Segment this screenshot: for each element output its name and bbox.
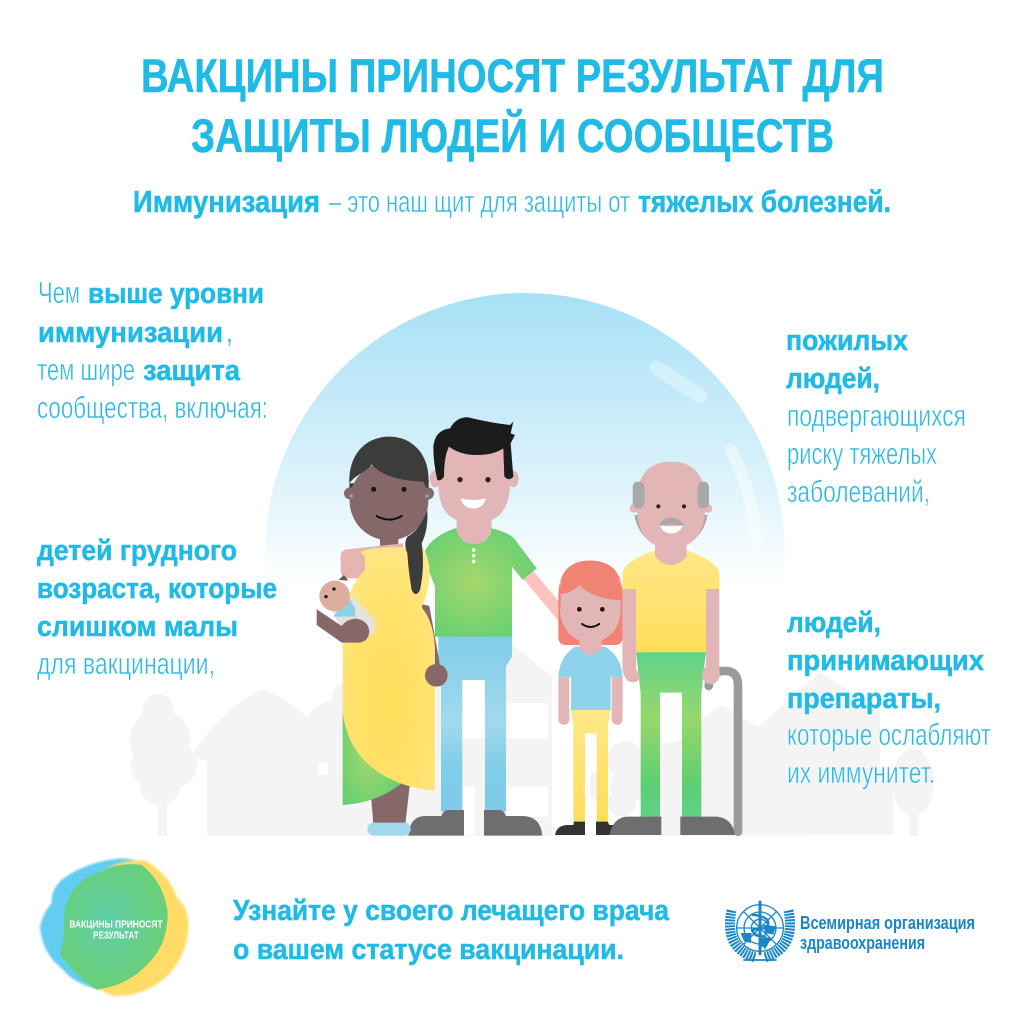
man: eyes	[457, 477, 491, 482]
subtitle: тяжелых болезней.	[638, 184, 891, 219]
baby: body	[333, 597, 355, 617]
background: windows	[318, 680, 548, 835]
woman: shoulder	[341, 543, 403, 578]
protective dome	[265, 293, 785, 600]
logo: yellow blob	[92, 860, 189, 996]
girl: fringe	[558, 561, 623, 607]
WHO name: Всемирная организация	[800, 913, 975, 933]
grandfather	[609, 462, 738, 835]
man: shirt	[423, 528, 537, 637]
logo: green blob	[60, 864, 168, 989]
baby: hair	[338, 575, 348, 581]
woman: face	[350, 462, 428, 540]
WHO emblem	[730, 902, 790, 960]
man: arm	[528, 575, 563, 617]
text block: intro: выше уровни	[88, 278, 264, 310]
WHO name	[800, 913, 975, 953]
WHO: ribbon	[743, 957, 777, 962]
campaign logo	[40, 858, 189, 996]
grandfather: shirt	[622, 550, 719, 652]
text block: intro	[37, 275, 268, 425]
WHO: continents	[741, 925, 776, 950]
text block: immunocompromised	[787, 607, 991, 790]
woman: hair top	[349, 437, 429, 483]
man: hair	[433, 417, 515, 480]
text block: elderly: подвергающихся	[787, 398, 966, 433]
grandfather: beard edge	[634, 515, 708, 544]
girl: smile	[582, 624, 599, 627]
woman: holding arm	[317, 609, 369, 643]
logo: text: РЕЗУЛЬТАТ	[93, 931, 139, 942]
woman: neck	[380, 532, 398, 552]
background: central building	[340, 637, 552, 836]
text block: intro: ,	[225, 314, 234, 349]
call to action: Узнайте у своего лечащего врача	[233, 895, 670, 927]
woman: hand	[425, 664, 448, 687]
girl	[555, 561, 627, 835]
grandfather: shoes	[609, 817, 735, 835]
text block: immunocompromised: препараты,	[787, 683, 941, 715]
text block: elderly: риску тяжелых	[787, 436, 937, 471]
subtitle	[133, 184, 891, 219]
man: trousers	[438, 635, 512, 812]
text block: immunocompromised: людей,	[787, 607, 881, 639]
woman: eyes	[371, 487, 406, 492]
background: middle tree	[590, 741, 646, 817]
baby: head	[319, 581, 350, 611]
text block: elderly: людей,	[786, 363, 880, 395]
baby: wrap	[330, 597, 375, 635]
grandfather: eyes	[656, 504, 686, 508]
background: right tree	[892, 749, 934, 836]
grandfather: ears	[630, 504, 712, 513]
background: neighbourhood silhouette	[130, 637, 934, 836]
WHO: snake	[752, 915, 768, 946]
text block: infants: слишком малы	[37, 611, 238, 643]
girl: trousers	[571, 710, 611, 823]
man: shoes	[408, 810, 542, 836]
text block: infants: для вакцинации,	[37, 646, 215, 681]
grandfather: head	[637, 462, 706, 565]
grandfather: moustache	[659, 518, 683, 526]
background: left house	[192, 682, 345, 836]
woman: arm	[422, 604, 441, 668]
woman: hair back	[349, 480, 429, 517]
woman: earrings	[350, 494, 429, 498]
woman: green underskirt	[343, 707, 402, 805]
girl: shoes	[555, 822, 627, 835]
man: head	[438, 443, 510, 544]
woman: legs	[370, 783, 410, 824]
WHO: staff	[755, 902, 764, 954]
background: left tree	[130, 694, 197, 836]
girl: eyes	[577, 607, 605, 612]
text block: infants	[37, 535, 277, 681]
text block: elderly: пожилых	[786, 325, 908, 357]
logo: text	[69, 920, 163, 942]
girl: face	[560, 580, 621, 655]
man: buttons	[472, 548, 475, 563]
logo: text: ВАКЦИНЫ ПРИНОСЯТ	[69, 920, 163, 931]
text block: infants: возраста, которые	[37, 573, 277, 605]
call to action: о вашем статусе вакцинации.	[233, 934, 624, 966]
call to action	[233, 895, 670, 966]
title	[141, 49, 884, 162]
grandfather: arms	[622, 587, 720, 684]
grandfather: cane	[709, 671, 738, 832]
baby: eyes	[324, 587, 336, 598]
man: smile	[461, 498, 486, 508]
text block: intro: тем шире	[37, 352, 135, 387]
man	[408, 417, 563, 836]
text block: intro: защита	[143, 355, 241, 387]
girl: arms	[558, 677, 623, 725]
text block: intro: иммунизации	[38, 317, 223, 349]
woman: dress	[343, 547, 435, 791]
subtitle: Иммунизация	[133, 184, 320, 219]
woman: braid	[405, 510, 427, 594]
WHO: globe	[737, 905, 783, 951]
text block: elderly: заболеваний,	[787, 474, 930, 509]
grandfather: mouth	[660, 525, 683, 533]
background: right houses	[660, 672, 893, 836]
text block: immunocompromised: принимающих	[787, 645, 984, 677]
text block: intro: Чем	[38, 275, 80, 310]
text block: elderly	[786, 325, 966, 509]
text block: infants: детей грудного	[37, 535, 237, 567]
title: ЗАЩИТЫ ЛЮДЕЙ И СООБЩЕСТВ	[191, 109, 834, 162]
woman: smile	[377, 516, 402, 520]
WHO: wreath	[730, 910, 790, 957]
woman: ears	[344, 487, 434, 499]
text block: immunocompromised: их иммунитет.	[787, 755, 935, 790]
subtitle: – это наш щит для защиты от	[329, 184, 630, 219]
woman: foot	[367, 823, 411, 836]
girl: hair back	[558, 561, 623, 645]
man: ears	[430, 471, 519, 487]
woman with baby	[317, 437, 448, 836]
girl: shirt	[558, 647, 623, 710]
logo: blue blob	[40, 858, 147, 990]
text block: intro: сообщества, включая:	[37, 390, 268, 425]
WHO name: здравоохранения	[800, 933, 925, 953]
grandfather: trousers	[636, 652, 706, 818]
grandfather: side hair	[633, 482, 709, 508]
